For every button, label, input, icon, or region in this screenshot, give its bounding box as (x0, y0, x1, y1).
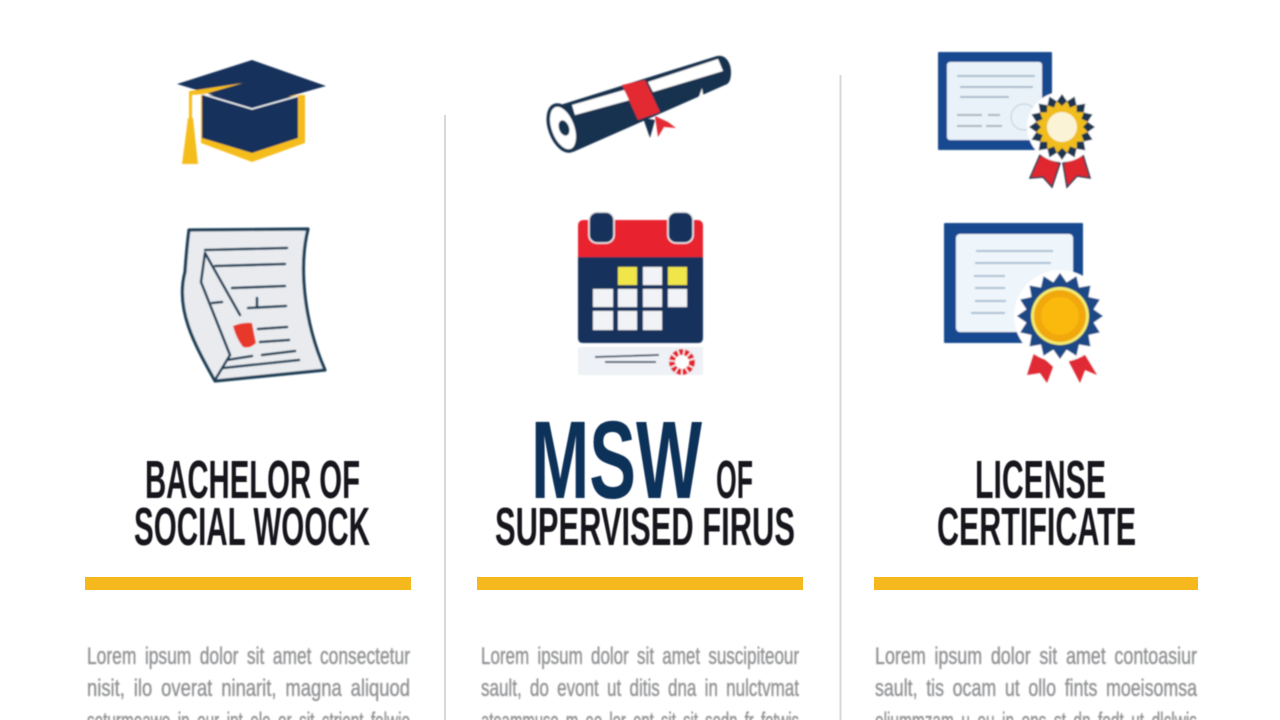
yellow divider bar (85, 577, 411, 590)
text block: column three (875, 643, 1197, 720)
icon: certificate with rosette (938, 52, 1097, 187)
text block: column two: Lorem ipsum dolor sit amet suscipiteour (481, 643, 799, 670)
heading: bachelor of social work: BACHELOR OF (145, 450, 360, 510)
icon: diploma scroll (543, 56, 731, 155)
text block: column two: sault, do evont ut ditis dna in nulctvmat (481, 675, 799, 702)
heading: msw of supervised hours: MSW (531, 399, 702, 522)
heading: license certificate (937, 450, 1136, 557)
text block: column one: nisit, ilo overat ninarit, magna aliquod (87, 675, 410, 702)
panel: license certificate (874, 52, 1198, 720)
icon: calendar with certificate (578, 212, 703, 375)
icon: curled paper with quill (182, 229, 325, 381)
heading: msw of supervised hours: SUPERVISED FIRUS (495, 497, 795, 557)
text block: column one (87, 643, 410, 720)
heading: bachelor of social work (134, 450, 370, 557)
heading: msw of supervised hours: OF (716, 450, 753, 510)
heading: license certificate: LICENSE (975, 450, 1106, 510)
icon: certificate with gold seal (944, 223, 1106, 383)
heading: msw of supervised hours (495, 399, 795, 557)
panel: bachelor of social work (85, 60, 411, 720)
text block: column two (481, 643, 799, 720)
yellow divider bar (477, 577, 803, 590)
heading: license certificate: CERTIFICATE (937, 497, 1136, 557)
heading: bachelor of social work: SOCIAL WOOCK (134, 497, 370, 557)
icon: graduation cap (177, 60, 326, 164)
text block: column one: Lorem ipsum dolor sit amet consectetur (87, 643, 410, 670)
panel: msw supervised hours (477, 56, 803, 720)
yellow divider bar (874, 577, 1198, 590)
